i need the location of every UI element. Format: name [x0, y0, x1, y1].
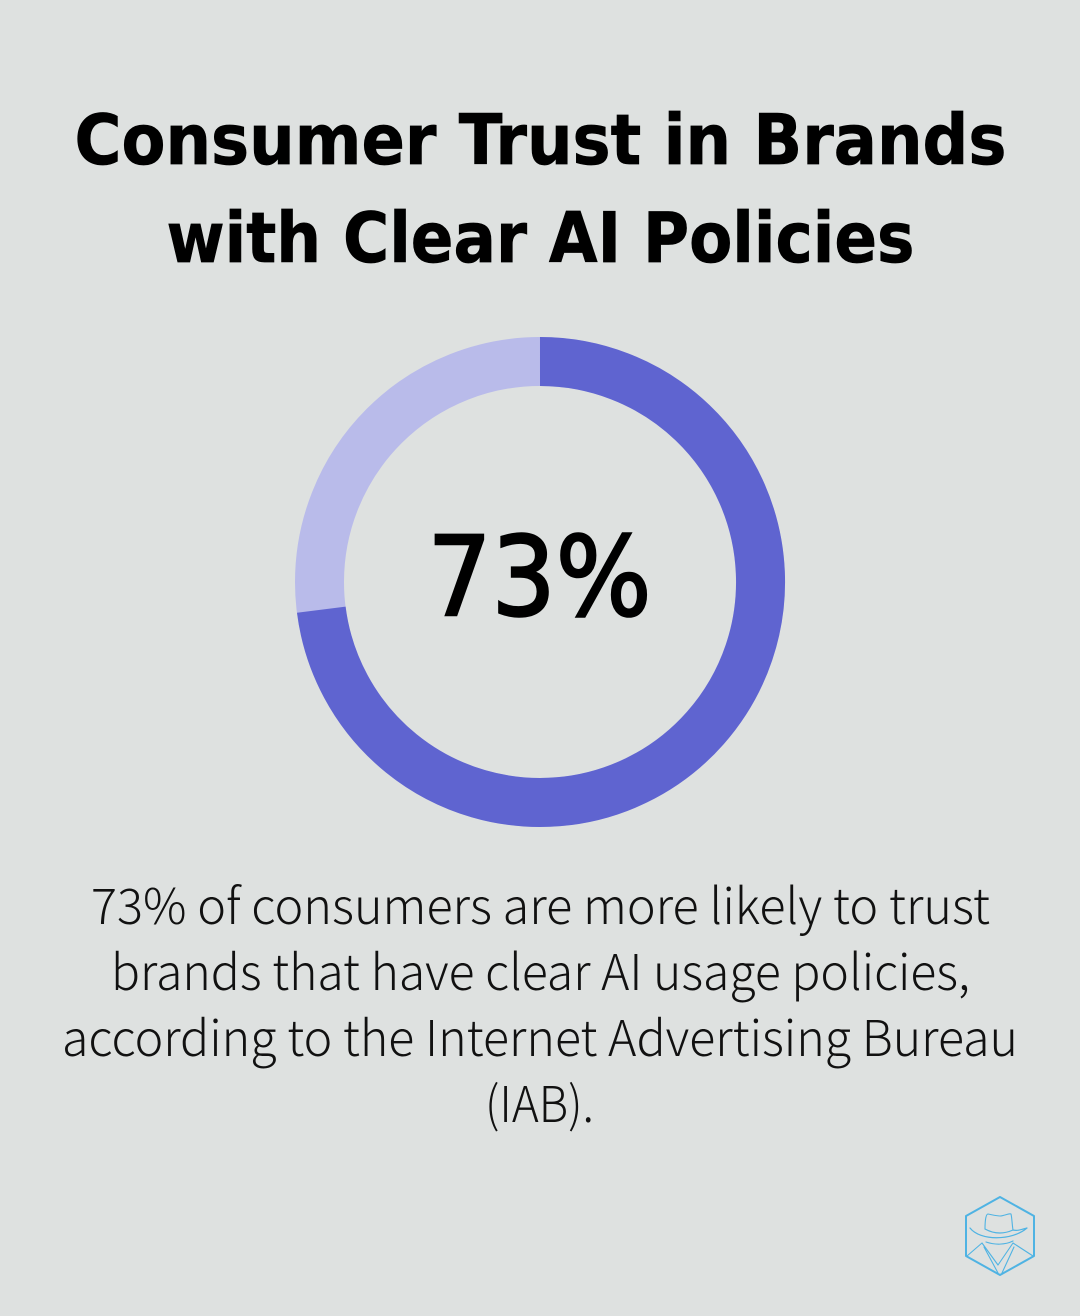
remaining share ring: [320, 362, 760, 802]
description text: (IAB).: [485, 1066, 594, 1137]
logo hexagon: [966, 1197, 1034, 1275]
icon: hexagon spy logo: [966, 1197, 1034, 1275]
title: Consumer Trust in Brands: [74, 100, 1006, 181]
title: with Clear AI Policies: [166, 198, 914, 279]
donut chart: 73%: [320, 362, 761, 803]
logo hat: [985, 1214, 1013, 1230]
description text: 73% of consumers are more likely to trust: [91, 868, 990, 939]
description text: according to the Internet Advertising Bureau: [62, 1000, 1018, 1071]
description text: brands that have clear AI usage policies,: [111, 934, 970, 1005]
title: [74, 100, 1006, 279]
description text: [62, 868, 1018, 1137]
73% share arc: [321, 362, 761, 803]
logo coat: [967, 1241, 1033, 1273]
donut value: 73%: [428, 513, 652, 641]
